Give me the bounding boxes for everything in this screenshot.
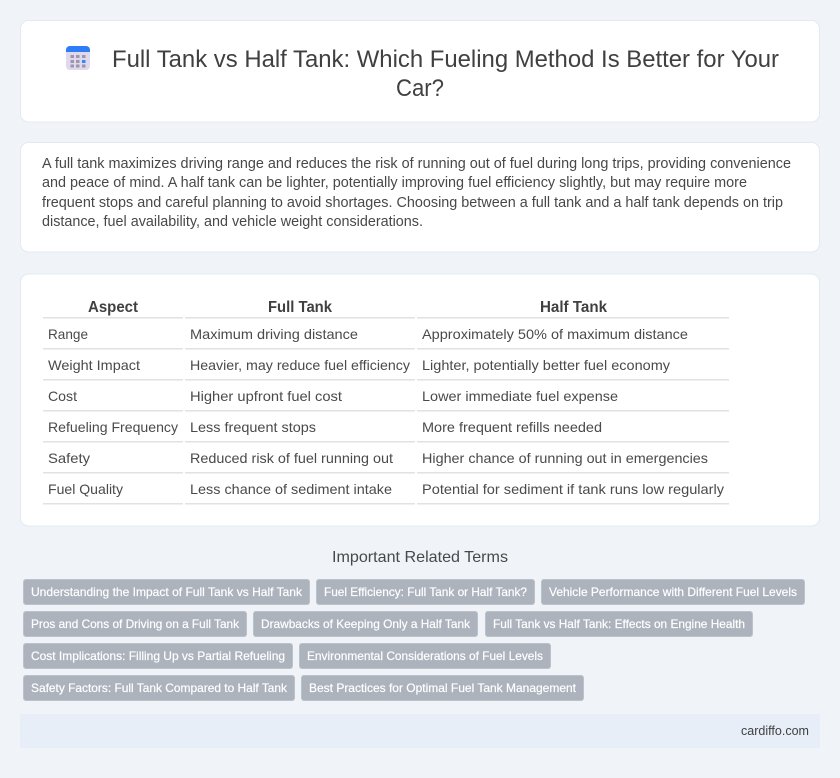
row: weight impact: Heavier, may reduce fuel efficiency (190, 357, 410, 373)
table header: Half Tank (540, 299, 607, 316)
text block: summary: frequent stops and careful planning to avoid shortages. Choosing between a full tank and a half tank depends on trip (42, 195, 783, 211)
tag (486, 612, 752, 636)
row: cost (48, 388, 618, 404)
tag (24, 612, 246, 636)
tag: Fuel Efficiency: Full Tank or Half Tank? (324, 585, 527, 599)
tag: Environmental Considerations of Fuel Levels (307, 649, 543, 663)
row: weight impact: Lighter, potentially better fuel economy (422, 357, 670, 373)
row: fuel quality: Less chance of sediment intake (190, 481, 392, 497)
tag: Pros and Cons of Driving on a Full Tank (31, 617, 240, 631)
tag: Cost Implications: Filling Up vs Partial Refueling (31, 649, 285, 663)
tag (254, 612, 478, 636)
panel: header (20, 20, 820, 122)
row: fuel quality (48, 481, 724, 497)
table header: Aspect (88, 299, 139, 316)
tag (24, 644, 292, 668)
row: weight impact: Weight Impact (48, 357, 140, 373)
row: refueling frequency: More frequent refills needed (422, 419, 602, 435)
icon: calendar (66, 46, 90, 70)
tag (542, 580, 804, 604)
row: weight impact (48, 357, 670, 373)
text block: summary: A full tank maximizes driving range and reduces the risk of running out of fuel during long trips, providing convenience (42, 156, 791, 172)
tag (302, 676, 584, 700)
row: safety: Safety (48, 450, 90, 466)
row: fuel quality: Potential for sediment if tank runs low regularly (422, 481, 724, 497)
panel: comparison table (20, 274, 820, 526)
row: safety (48, 450, 708, 466)
panel: description (20, 142, 820, 252)
row: range: Range (48, 326, 88, 342)
row: safety: Higher chance of running out in emergencies (422, 450, 708, 466)
row: range: Maximum driving distance (190, 326, 358, 342)
row: safety: Reduced risk of fuel running out (190, 450, 393, 466)
tag: Safety Factors: Full Tank Compared to Half Tank (31, 681, 288, 695)
tag (316, 580, 534, 604)
tag (300, 644, 550, 668)
title (112, 46, 779, 102)
row: fuel quality: Fuel Quality (48, 481, 123, 497)
row: cost: Cost (48, 388, 77, 404)
table header (88, 299, 607, 316)
tag: Understanding the Impact of Full Tank vs Half Tank (31, 585, 303, 599)
tag (24, 580, 310, 604)
row: range: Approximately 50% of maximum distance (422, 326, 688, 342)
text block: summary: and peace of mind. A half tank can be lighter, potentially improving fuel efficiency slightly, but may require more (42, 175, 747, 191)
footer (20, 714, 820, 748)
tag: Vehicle Performance with Different Fuel Levels (549, 585, 797, 599)
title: Full Tank vs Half Tank: Which Fueling Method Is Better for Your (112, 46, 779, 73)
row: refueling frequency (48, 419, 602, 435)
footer: cardiffo.com (741, 724, 809, 738)
tag: Full Tank vs Half Tank: Effects on Engine Health (493, 617, 745, 631)
tag (24, 676, 294, 700)
row: range (48, 326, 688, 342)
tag: Best Practices for Optimal Fuel Tank Management (309, 681, 577, 695)
row: cost: Lower immediate fuel expense (422, 388, 618, 404)
row: refueling frequency: Refueling Frequency (48, 419, 178, 435)
row: refueling frequency: Less frequent stops (190, 419, 316, 435)
tag: Drawbacks of Keeping Only a Half Tank (261, 617, 471, 631)
text block: summary (42, 156, 791, 230)
row: cost: Higher upfront fuel cost (190, 388, 342, 404)
tags: related terms (24, 580, 804, 700)
title: Car? (396, 75, 444, 102)
heading: important related terms: Important Related Terms (332, 549, 508, 566)
table header: Full Tank (268, 299, 332, 316)
text block: summary: distance, fuel availability, and vehicle weight considerations. (42, 214, 423, 230)
